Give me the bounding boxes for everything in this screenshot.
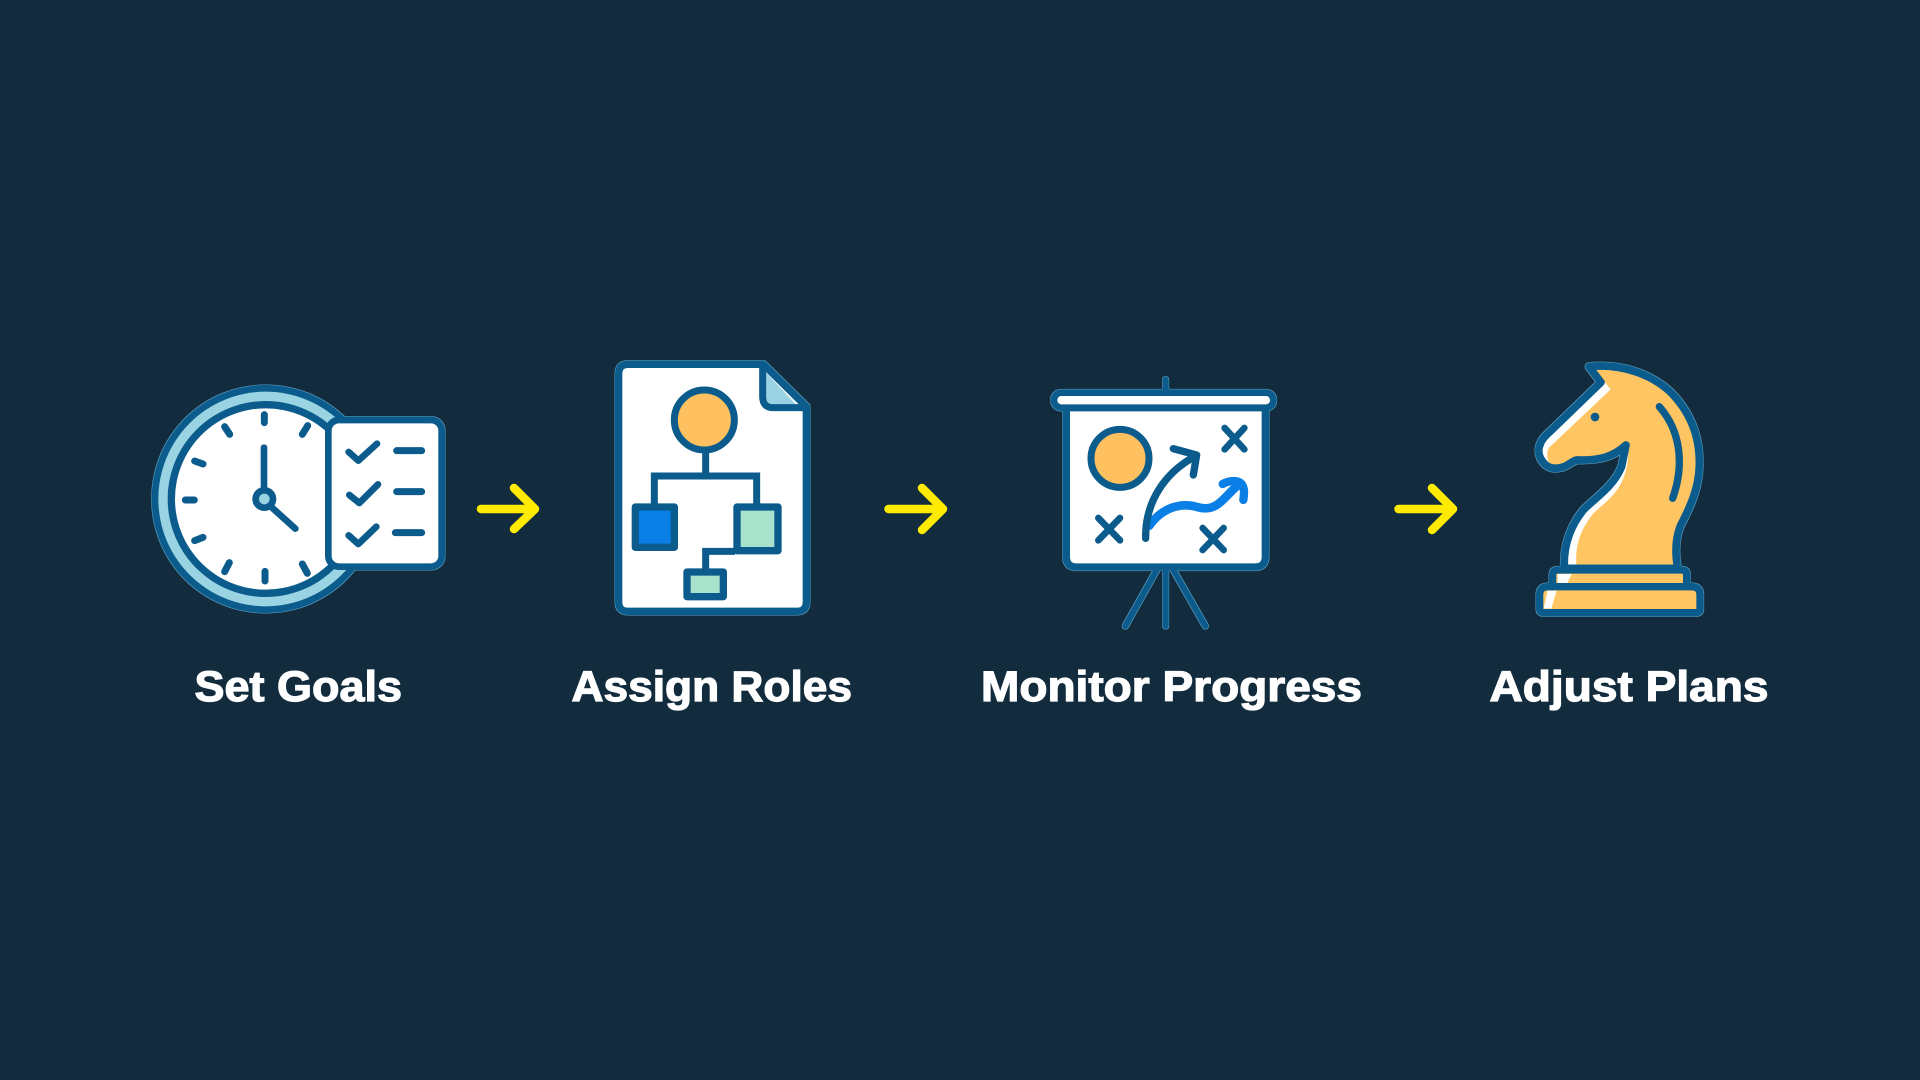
label: assign roles: Assign Roles [572, 663, 852, 711]
page fold [763, 366, 806, 408]
arrow 2 [888, 488, 943, 530]
step: adjust plans [1490, 366, 1768, 711]
board [1066, 408, 1265, 567]
arrow 3 [1398, 488, 1453, 530]
eye [1591, 413, 1599, 421]
knight white body [1539, 366, 1699, 568]
blue role box [635, 507, 674, 547]
lower base [1540, 587, 1700, 613]
x marks [1098, 428, 1244, 550]
label: monitor progress: Monitor Progress [981, 663, 1362, 711]
small green role box [687, 572, 723, 597]
orange circle [1091, 429, 1149, 487]
upper base [1553, 570, 1687, 587]
blue wavy arrow [1149, 485, 1238, 526]
checklist card [328, 420, 442, 567]
green role box [737, 507, 778, 551]
mane line [1659, 407, 1679, 498]
icon: org chart document [619, 364, 806, 611]
icon: clock with checklist [152, 385, 442, 613]
blue arrow head [1223, 481, 1244, 500]
easel legs and peg [1125, 380, 1205, 626]
knight outline [1539, 366, 1699, 568]
step: assign roles [572, 364, 852, 711]
arrow 1 [481, 488, 535, 529]
step: set goals [152, 385, 442, 711]
chart connectors [654, 450, 757, 570]
top bar [1054, 393, 1273, 408]
dark arrow [1146, 449, 1197, 538]
label: adjust plans: Adjust Plans [1490, 663, 1768, 711]
top role circle [674, 390, 734, 450]
clock face [152, 385, 380, 613]
step: monitor progress [981, 380, 1362, 711]
label: set goals: Set Goals [194, 663, 402, 711]
icon: strategy presentation board [1054, 380, 1273, 626]
knight orange fill [1547, 368, 1699, 568]
icon: chess knight [1539, 366, 1700, 613]
document page [619, 364, 806, 611]
